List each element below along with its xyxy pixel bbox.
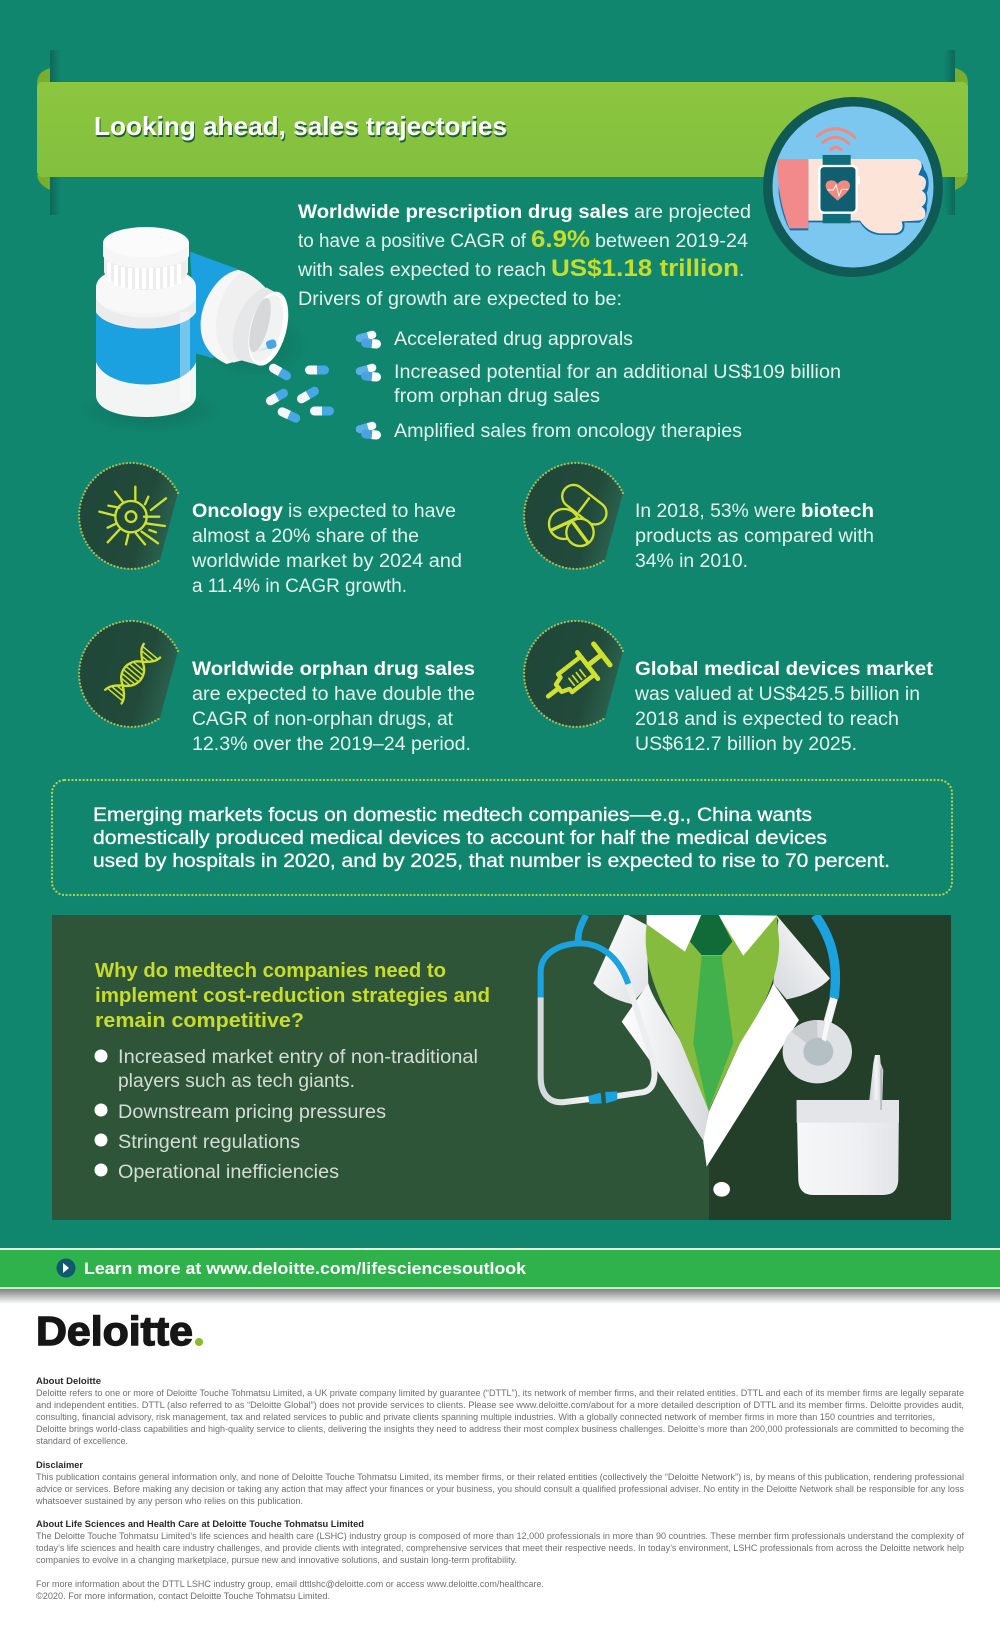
text: medical devices market: 2018 and is expected to reach: [635, 709, 899, 730]
text: oncology: [191, 501, 462, 597]
intro text: are projected: [634, 202, 751, 223]
text: orphan drug sales: 12.3% over the 2019–24 period.: [192, 734, 471, 755]
panel heading: [95, 960, 490, 1032]
text: medical devices market: [634, 659, 934, 755]
coat button: [713, 1182, 730, 1197]
lying bottle: [190, 252, 296, 370]
text: orphan drug sales: are expected to have double the: [192, 684, 475, 705]
growth drivers list: [355, 329, 841, 442]
footer: contact and copyright: ©2020. For more information, contact Deloitte Touche Tohmatsu Limited.: [36, 1591, 330, 1601]
intro text: between 2019-24: [595, 231, 748, 252]
text: biotech: 34% in 2010.: [635, 551, 748, 572]
text: orphan drug sales: [192, 659, 475, 755]
footer: about Deloitte: and independent entities. DTTL (also referred to as “Deloitte Global”) does not provide services to clients. Please see www.deloitte.com/about for a more detailed description of DTTL and its member firms. Deloitte provides audit,: [36, 1400, 964, 1410]
icon: capsules bullet 2: [355, 363, 381, 382]
title: Looking ahead, sales trajectories: [94, 111, 507, 141]
panel heading: implement cost-reduction strategies and: [95, 985, 490, 1007]
footer: disclaimer: whatsoever sustained by any person who relies on this publication.: [35, 1496, 303, 1506]
icon: spilled pill bottles: [75, 227, 334, 434]
panel bullet list: Stringent regulations: [118, 1131, 300, 1153]
link text: Learn more at www.deloitte.com/lifesciencesoutlook: [84, 1259, 527, 1278]
icon: play arrow circle: [56, 1258, 76, 1278]
page background: [0, 0, 1000, 1250]
footer: disclaimer: [35, 1460, 965, 1506]
text: orphan drug sales: CAGR of non-orphan drugs, at: [192, 709, 454, 730]
footer: about Deloitte: standard of excellence.: [36, 1436, 128, 1446]
footer: about life sciences and health care: companies to evolve in a changing marketplace, pursue new and innovative solutions, and sustain long-term profitability.: [36, 1555, 517, 1565]
pen and pocket: [869, 1055, 883, 1100]
text: oncology: a 11.4% in CAGR growth.: [192, 576, 407, 597]
intro text: to have a positive CAGR of: [298, 231, 527, 252]
intro text: [297, 202, 751, 310]
callout: emerging markets: used by hospitals in 2020, and by 2025, that number is expected to rise to 70 percent.: [93, 850, 890, 872]
footer: about life sciences and health care: About Life Sciences and Health Care at Deloitte Touche Tohmatsu Limited: [36, 1519, 364, 1529]
icon: medical devices syringe badge: [524, 621, 623, 727]
panel bullet list: players such as tech giants.: [118, 1070, 355, 1092]
footer: contact and copyright: For more information about the DTTL LSHC industry group, email dttlshc@deloitte.com or access www.deloitte.com/healthcare.: [36, 1579, 544, 1589]
footer: about Deloitte: [36, 1376, 964, 1446]
text: biotech: products as compared with: [635, 526, 874, 547]
panel bullet list: Operational inefficiencies: [118, 1161, 339, 1183]
intro text: with sales expected to reach: [297, 260, 546, 281]
text: biotech: biotech: [801, 501, 874, 522]
footer: about life sciences and health care: [36, 1519, 965, 1565]
growth drivers list: Accelerated drug approvals: [394, 329, 633, 350]
panel bullet list: Increased market entry of non-traditional: [118, 1046, 478, 1068]
icon: biotech pills badge: [524, 463, 623, 569]
text: medical devices market: was valued at US$425.5 billion in: [634, 684, 920, 705]
text: oncology: almost a 20% share of the: [192, 526, 419, 547]
panel: cost-reduction strategies: [52, 913, 951, 1220]
text: oncology: Oncology: [192, 501, 283, 522]
panel heading: Why do medtech companies need to: [95, 960, 446, 982]
intro text: .: [739, 260, 744, 281]
text: oncology: worldwide market by 2024 and: [191, 551, 462, 572]
illustration: doctor coat with stethoscope: [541, 913, 899, 1197]
learn more band: [0, 1248, 1000, 1289]
growth drivers list: from orphan drug sales: [394, 386, 600, 407]
text: biotech: In 2018, 53% were: [635, 501, 796, 522]
stat: US$1.18 trillion: US$1.18 trillion: [551, 255, 739, 282]
footer: about Deloitte: About Deloitte: [36, 1376, 101, 1386]
stethoscope: [578, 915, 586, 943]
growth drivers list: Increased potential for an additional US$109 billion: [394, 362, 841, 383]
loose pills: [267, 362, 293, 382]
callout: emerging markets: [52, 780, 952, 895]
footer: about Deloitte: Deloitte brings world-class capabilities and high-quality service to clients, delivering the insights they need to address their most complex business challenges. Deloitte’s more than 200,000 professionals are committed to becoming the: [36, 1424, 964, 1434]
footer: contact and copyright: [36, 1579, 544, 1601]
footer: about life sciences and health care: The Deloitte Touche Tohmatsu Limited’s life sciences and health care (LSHC) industry group is composed of more than 12,000 professionals in more than 90 countries. These member firm professionals understand the complexity of: [36, 1531, 965, 1541]
growth drivers list: Amplified sales from oncology therapies: [394, 421, 742, 442]
panel heading: remain competitive?: [95, 1010, 304, 1032]
ribbon banner: [37, 50, 968, 215]
callout: emerging markets: domestically produced medical devices to account for half the medical devices: [93, 827, 827, 849]
callout: emerging markets: Emerging markets focus on domestic medtech companies—e.g., China wants: [93, 804, 812, 826]
footer: disclaimer: This publication contains general information only, and none of Deloitte Touche Tohmatsu Limited, its member firms, or their related entities (collectively the “Deloitte Network”) is, by means of this publication, rendering professional: [36, 1472, 964, 1482]
footer: disclaimer: advice or services. Before making any decision or taking any action that may affect your finances or your business, you should consult a qualified professional adviser. No entity in the Deloitte Network shall be responsible for any loss: [36, 1484, 965, 1494]
text: medical devices market: Global medical devices market: [635, 659, 934, 680]
stat: 6.9%: 6.9%: [531, 226, 590, 253]
icon: smartwatch on wrist: [763, 97, 943, 277]
icon: orphan drug DNA badge: [79, 621, 178, 727]
footer: about Deloitte: consulting, financial advisory, risk management, tax and related services to public and private clients spanning multiple industries. With a globally connected network of member firms in more than 150 countries and territories,: [36, 1412, 935, 1422]
icon: capsules bullet 1: [355, 330, 381, 349]
text: biotech: [635, 501, 874, 572]
panel bullet list: [94, 1046, 478, 1183]
text: orphan drug sales: Worldwide orphan drug sales: [192, 659, 475, 680]
footer: about Deloitte: Deloitte refers to one or more of Deloitte Touche Tohmatsu Limited, a UK private company limited by guarantee (“DTTL”), its network of member firms, and their related entities. DTTL and each of its member firms are legally separate: [36, 1388, 964, 1398]
panel bullet list: Downstream pricing pressures: [118, 1101, 386, 1123]
text: oncology: is expected to have: [288, 501, 456, 522]
footer: about life sciences and health care: today’s life sciences and health care industry challenges, and provide clients with integrated, comprehensive services that meet their respective needs. In today’s environment, LSHC professionals from across the Deloitte network help: [36, 1543, 964, 1553]
footer background: [0, 1289, 1000, 1635]
intro text: Worldwide prescription drug sales: [298, 202, 629, 223]
intro text: Drivers of growth are expected to be:: [298, 289, 622, 310]
footer: disclaimer: Disclaimer: [36, 1460, 84, 1470]
icon: capsules bullet 3: [355, 421, 381, 440]
icon: oncology cell badge: [79, 463, 178, 569]
standing bottle: [96, 268, 196, 417]
text: medical devices market: US$612.7 billion by 2025.: [635, 734, 857, 755]
Deloitte logo: Deloitte: [36, 1308, 193, 1354]
